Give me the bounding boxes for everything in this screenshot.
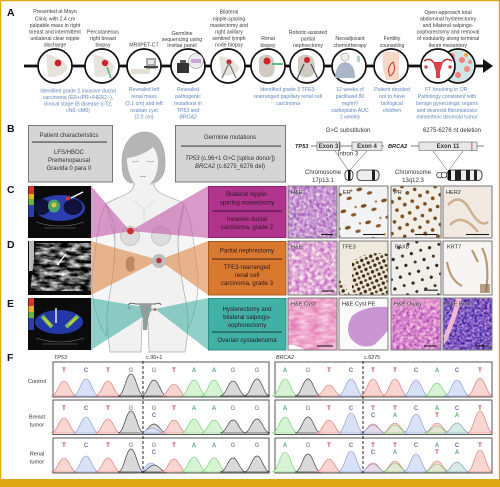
finding: chemo regimen: 12 weeks of — [336, 87, 364, 93]
chromatogram: TP53 breast tumor — [51, 400, 270, 434]
finding: breast pathology: carcinoma (ER+/PR+/HER2−), — [43, 95, 113, 101]
icon: fertility — [374, 49, 408, 83]
finding: renal pathology: rearranged papillary renal cell — [254, 94, 322, 100]
chromatogram: TP53 control: T — [172, 368, 176, 374]
finding: gynecologic pathology: FT brushing in OR: — [425, 87, 469, 93]
icon: chemotherapy — [332, 49, 366, 83]
chromosome 17 — [345, 170, 379, 180]
chromatogram labels: c.96+1 — [146, 355, 162, 361]
tile: KRT7: KRT7 — [447, 244, 461, 250]
chromatogram labels: TP53 — [54, 355, 67, 361]
finding: fertility decision: biological — [381, 101, 403, 107]
germline mutations box: TP53 (c.96+1 G>C [splice donor]) — [185, 156, 275, 162]
histology row: breast — [288, 186, 492, 238]
chromatogram: BRCA2 renal tumor: T — [435, 450, 439, 456]
germline mutations box: Germline mutations — [204, 135, 256, 141]
chromatogram: BRCA2 control: T — [371, 368, 375, 374]
BRCA2 gene: BRCA2 — [388, 144, 408, 150]
chromatogram: TP53 control: A — [212, 368, 217, 374]
chromatogram: TP53 control: G — [129, 368, 134, 374]
chromatogram: BRCA2 control: T — [393, 368, 397, 374]
step: presentation: breast and intermittent — [29, 30, 81, 36]
tile: TFE3: TFE3 — [342, 244, 356, 250]
BRCA2 gene: 6275-6276 nt deletion — [423, 128, 481, 134]
chromatogram: TP53 renal tumor: C — [152, 450, 157, 456]
magenta fans to breast — [91, 186, 208, 238]
TP53 gene: TP53 — [295, 144, 309, 150]
icon: sequencer — [171, 49, 205, 83]
TP53 gene: Exon 4 — [357, 144, 377, 150]
chromatogram: BRCA2 renal tumor: G — [306, 443, 311, 449]
icon: breast biopsy — [85, 49, 119, 83]
chromatogram: BRCA2 breast tumor: A — [283, 406, 288, 412]
ultrasound image — [28, 241, 91, 295]
finding: gynecologic pathology: mesenteric desmoid tumor — [416, 114, 478, 120]
chromatogram: TP53 breast tumor: A — [192, 406, 197, 412]
chromatogram: TP53 breast tumor: G — [255, 406, 260, 412]
chromatogram: TP53 renal tumor: G — [129, 443, 134, 449]
icon: mastectomy — [211, 49, 245, 83]
finding: mutations: pathogenic — [175, 94, 201, 100]
germline mutations box — [176, 126, 286, 182]
chromatogram: TP53 breast tumor: C — [152, 413, 157, 419]
chromatogram: BRCA2 renal tumor: A — [455, 450, 460, 456]
teal fans to ovary — [91, 298, 208, 350]
chromatogram: TP53 renal tumor — [51, 438, 270, 473]
finding: chemo regimen: mg/m²/ — [342, 101, 359, 107]
chromatogram labels: tumor — [30, 460, 44, 466]
chromatogram: BRCA2 control: G — [306, 368, 311, 374]
finding: chemo regimen: carboplatin AUC — [331, 108, 369, 114]
face — [127, 147, 158, 188]
panel label F: F — [7, 352, 14, 364]
chromatogram: TP53 control: G — [255, 368, 260, 374]
chromatogram: BRCA2 renal tumor: A — [393, 450, 398, 456]
PET-CT chest image — [28, 186, 91, 238]
icon: nephrectomy — [290, 49, 324, 83]
chromatogram: BRCA2 renal tumor: C — [371, 450, 376, 456]
finding: chemo regimen: 2 weekly — [340, 114, 360, 120]
panel label A: A — [7, 7, 15, 19]
tile: H&E — [288, 186, 337, 238]
chromatogram: TP53 control: C — [84, 368, 89, 374]
chromatogram: BRCA2 breast tumor: T — [327, 406, 331, 412]
gene diagrams — [295, 128, 484, 184]
panel label D: D — [7, 239, 15, 251]
tile: PAX8 — [391, 241, 441, 295]
chromatogram: TP53 control: G — [231, 368, 236, 374]
chromatogram: BRCA2 renal tumor — [272, 438, 493, 473]
chromatogram: BRCA2 renal tumor: T — [478, 443, 482, 449]
step: presentation: Clinic with 2.4 cm — [35, 16, 75, 22]
box: breast treatment: carcinoma, grade 2 — [221, 224, 274, 231]
step: biopsy: Percutaneous — [87, 30, 119, 36]
chromatogram: BRCA2 control: A — [435, 368, 440, 374]
step: mastectomy: mastectomy and — [210, 23, 248, 29]
step: presentation: unilateral clear nipple — [30, 36, 80, 42]
BRCA2 gene: Chromosome — [395, 170, 432, 176]
tile: H&E: H&E — [291, 244, 303, 250]
step: mastectomy: right axillary — [215, 30, 243, 36]
box: breast treatment: Bilateral nipple- — [226, 191, 268, 198]
finding: imaging: Revealed left — [129, 87, 160, 93]
finding: imaging: ovarian cyst — [130, 108, 158, 114]
step: nephrectomy: partial — [301, 36, 315, 42]
chromatogram: TP53 breast tumor: C — [84, 406, 89, 412]
icon: FT brushing pattern — [441, 49, 475, 83]
finding: renal pathology: Identified grade 3 TFE3- — [260, 87, 316, 93]
chromatogram: BRCA2 breast tumor: T — [393, 406, 397, 412]
step: chemotherapy: Neoadjuvant — [335, 36, 365, 42]
finding: imaging: renal mass — [131, 94, 157, 100]
chromatogram: BRCA2 breast tumor: C — [349, 406, 354, 412]
tile: H&E Cyst: H&E Cyst — [291, 302, 316, 308]
chromatogram: BRCA2 renal tumor: T — [327, 443, 331, 449]
BRCA2 gene — [388, 128, 484, 184]
box: renal treatment: renal cell — [235, 272, 259, 279]
chromatogram: TP53 renal tumor: T — [106, 443, 110, 449]
step: mastectomy: node biopsy — [215, 42, 243, 48]
hair — [122, 132, 165, 183]
illustration: female body — [92, 132, 198, 352]
finding: fertility decision: Patient decided — [374, 87, 410, 93]
chromatogram: TP53 renal tumor: G — [152, 443, 157, 449]
chromatogram: BRCA2 breast tumor — [272, 400, 493, 434]
chromatogram: TP53 control — [51, 362, 270, 397]
step: hysterectomy: of nodularity along terminal — [417, 36, 479, 42]
chromatogram: BRCA2 breast tumor: C — [371, 413, 376, 419]
chromatogram labels: Renal — [30, 452, 44, 458]
histology row: gynecologic — [288, 298, 492, 350]
finding: gynecologic pathology: and desmoid fibromatosis/ — [417, 108, 478, 114]
chromatogram: TP53 renal tumor: T — [62, 443, 66, 449]
tile: TFE3 — [339, 241, 388, 295]
chromatogram: BRCA2 renal tumor: C — [414, 443, 419, 449]
chromatogram: TP53 renal tumor: A — [212, 443, 217, 449]
chromatogram: BRCA2 control — [272, 362, 493, 397]
finding: mutations: Revealed — [177, 87, 199, 93]
chromatogram: TP53 renal tumor: T — [172, 443, 176, 449]
step: presentation: discharge — [44, 42, 66, 48]
tile: H&E Cyst PE: H&E Cyst PE — [342, 302, 376, 308]
chromatogram: TP53 breast tumor: T — [172, 406, 176, 412]
BRCA2 gene: 13q12.3 — [402, 178, 424, 184]
tile: H&E — [288, 241, 337, 295]
panel label B: B — [7, 123, 15, 135]
TP53 gene: Chromosome — [305, 170, 342, 176]
chromosome 13 — [437, 170, 482, 180]
kidneys — [126, 254, 166, 272]
finding: mutations: BRCA2 — [179, 114, 197, 120]
step: renal biopsy: biopsy — [260, 43, 276, 49]
icon: breast mass — [38, 49, 72, 83]
breast tumor — [127, 228, 134, 234]
chromatogram: TP53 breast tumor: T — [62, 406, 66, 412]
tile: H&E Endo: H&E Endo — [446, 302, 472, 308]
torso uptake — [35, 195, 85, 221]
chromatogram: TP53 renal tumor: A — [192, 443, 197, 449]
chromatogram: BRCA2 control: A — [283, 368, 288, 374]
finding: gynecologic pathology: Pathology consistent with — [418, 94, 476, 100]
tile: H&E Cyst PE — [339, 298, 388, 350]
step: hysterectomy: Open-approach total — [424, 10, 472, 16]
step: nephrectomy: nephrectomy — [293, 43, 323, 49]
box: gynecologic treatment: oophorectomy — [228, 322, 267, 329]
chromatogram: TP53 renal tumor: G — [255, 443, 260, 449]
finding: chemo regimen: paclitaxel 80 — [336, 94, 365, 100]
step: nephrectomy: Robotic-assisted — [289, 30, 327, 36]
gray scale — [29, 241, 34, 271]
chromatogram: BRCA2 renal tumor: T — [393, 443, 397, 449]
tile: HER2: HER2 — [446, 190, 461, 196]
tile: H&E Cyst — [288, 298, 337, 350]
finding: breast pathology: cN0, cM0) — [66, 108, 90, 114]
chromatogram: TP53 breast tumor: A — [212, 406, 217, 412]
TP53 gene: Exon 3 — [319, 144, 339, 150]
PET-CT pelvis image — [28, 298, 91, 350]
patient characteristics box — [28, 126, 112, 182]
icon: renal biopsy — [251, 49, 285, 83]
chromatogram: BRCA2 renal tumor: A — [283, 443, 288, 449]
step: presentation: palpable mass in right — [30, 23, 81, 29]
TP53 gene: Intron 3 — [338, 152, 359, 158]
tile: KRT7 — [443, 241, 492, 295]
chromatogram labels: BRCA2 — [276, 355, 294, 361]
box: breast treatment: Invasive ductal — [227, 216, 267, 223]
tile: PAX8: PAX8 — [395, 244, 409, 250]
step: hysterectomy: and bilateral salpingo- — [423, 23, 474, 29]
chromatogram: BRCA2 renal tumor: C — [455, 443, 460, 449]
tile: ER — [339, 186, 388, 238]
chromatogram: TP53 breast tumor: G — [152, 406, 157, 412]
color scale — [28, 186, 34, 217]
chromatogram: BRCA2 control: C — [349, 368, 354, 374]
panel A: timeline findings — [40, 87, 478, 120]
arms — [92, 204, 198, 336]
box: gynecologic treatment: Ovarian cystadenoma — [217, 337, 277, 344]
patient characteristics box: Gravida 0 para 0 — [47, 166, 92, 172]
step: germline sequencing: Invitae panel — [167, 43, 197, 49]
chromatogram: TP53 renal tumor: G — [231, 443, 236, 449]
box: breast treatment — [208, 186, 286, 238]
finding: imaging: (3.1 cm) and left — [125, 101, 163, 107]
chromatogram: TP53 control: T — [62, 368, 66, 374]
chromatogram labels: c.6275 — [364, 355, 380, 361]
patient characteristics box: Patient characteristics — [40, 133, 98, 139]
tile: ER: ER — [343, 190, 351, 196]
panel label E: E — [7, 298, 14, 310]
panel label C: C — [7, 184, 15, 196]
finding: breast pathology: clinical stage IB disease (cT2, — [44, 102, 112, 108]
step: mastectomy: sentinel lymph — [212, 36, 246, 42]
tile: H&E Endo — [443, 298, 492, 350]
finding: mutations: mutations in — [174, 101, 202, 107]
step: biopsy: right breast — [90, 36, 117, 42]
box: gynecologic treatment — [208, 298, 286, 350]
step: hysterectomy: abdominal hysterectomy — [420, 16, 477, 22]
chromatogram: TP53 control: G — [152, 368, 157, 374]
box: gynecologic treatment: bilateral salpingo- — [223, 314, 271, 321]
box: renal treatment — [208, 242, 286, 295]
ultrasound speckle — [30, 243, 91, 291]
step: mastectomy: nipple-sparing — [213, 16, 245, 22]
tile: PR — [391, 186, 441, 238]
tile: H&E Ovary: H&E Ovary — [394, 302, 422, 308]
step: imaging: MRI/PET-CT — [129, 42, 160, 48]
chromatogram labels — [28, 355, 380, 466]
step: presentation: Presented at Mayo — [33, 9, 77, 15]
panel A: timeline headings — [29, 9, 479, 49]
chromatogram: BRCA2 breast tumor: T — [371, 406, 375, 412]
finding: renal pathology: carcinoma — [276, 101, 300, 107]
finding: fertility decision: not to have — [379, 94, 405, 100]
chromatogram: BRCA2 breast tumor: A — [435, 406, 440, 412]
chromatogram: BRCA2 renal tumor: A — [435, 443, 440, 449]
germline mutations box: BRCA2 (c.6275_6276 del) — [195, 164, 265, 170]
TP53 gene: G>C substitution — [326, 128, 370, 134]
tile: H&E Ovary — [391, 298, 441, 350]
chromatogram: BRCA2 breast tumor: T — [478, 406, 482, 412]
icon: uterus — [421, 49, 455, 83]
finding: fertility decision: children — [383, 108, 401, 114]
chromatogram: BRCA2 breast tumor: A — [393, 413, 398, 419]
chromatogram: BRCA2 breast tumor: A — [455, 413, 460, 419]
box: renal treatment: TFE3-rearranged — [224, 264, 270, 271]
chromatogram: BRCA2 renal tumor: T — [371, 443, 375, 449]
step: germline sequencing: sequencing using — [162, 37, 202, 43]
step: hysterectomy: oophorectomy and removal — [417, 30, 479, 36]
TP53 gene: 17p13.1 — [312, 178, 334, 184]
box: gynecologic treatment: Hysterectomy and — [222, 306, 272, 313]
patient characteristics box: LFS/HBOC — [54, 150, 85, 156]
neck contour lines — [134, 200, 155, 222]
tile: HER2 — [443, 186, 492, 238]
mutation position dashed lines — [143, 361, 363, 473]
box: breast treatment: sparing mastectomy — [220, 200, 275, 206]
chromatogram: BRCA2 control: C — [455, 368, 460, 374]
chromatogram: BRCA2 breast tumor: C — [455, 406, 460, 412]
facial features — [132, 161, 154, 177]
chromatogram: TP53 control: T — [106, 368, 110, 374]
timeline arrow — [24, 59, 493, 73]
chromatogram: TP53 breast tumor: G — [231, 406, 236, 412]
finding: mutations: TP53 and — [177, 108, 199, 114]
chromatogram: TP53 breast tumor: G — [129, 406, 134, 412]
chromatogram labels: Breast — [29, 414, 46, 420]
chromatogram: BRCA2 control: C — [414, 368, 419, 374]
timeline icons — [38, 49, 475, 83]
box: renal treatment: Partial nephrectomy — [220, 248, 275, 254]
orange fans to kidney — [91, 241, 208, 295]
uterus and ovaries — [127, 303, 161, 330]
torso and legs — [106, 184, 188, 352]
step: mastectomy: Bilateral — [220, 10, 238, 16]
breast glands — [120, 226, 170, 246]
step: biopsy: biopsy — [96, 42, 111, 48]
box: renal treatment: carcinoma, grade 3 — [221, 280, 274, 287]
tile: PR: PR — [394, 190, 402, 196]
step: counseling: Fertility — [384, 36, 401, 42]
chromatogram: TP53 breast tumor: T — [106, 406, 110, 412]
step: renal biopsy: Renal — [261, 36, 275, 42]
chromatogram: BRCA2 control: T — [327, 368, 331, 374]
finding: gynecologic pathology: benign gynecologic organs — [416, 101, 478, 107]
color scale — [28, 298, 34, 330]
TP53 gene — [295, 128, 384, 184]
finding: breast pathology: Identified grade 2 invasive ductal — [40, 88, 116, 94]
step: germline sequencing: Germline — [171, 31, 193, 37]
histology row: kidney — [288, 241, 492, 295]
chromatogram: BRCA2 breast tumor: G — [306, 406, 311, 412]
chromatogram: TP53 control: A — [192, 368, 197, 374]
BRCA2 gene: Exon 11 — [437, 144, 460, 150]
chromatogram: TP53 renal tumor: C — [84, 443, 89, 449]
chromatogram: BRCA2 breast tumor: T — [435, 413, 439, 419]
chromatogram: BRCA2 control: T — [478, 368, 482, 374]
step: counseling: counseling — [380, 43, 405, 49]
chromatogram: BRCA2 breast tumor: C — [414, 406, 419, 412]
chromatogram labels: Control — [28, 379, 46, 385]
icon: scanner — [127, 49, 161, 83]
tile: H&E: H&E — [291, 190, 303, 196]
step: chemotherapy: chemotherapy — [334, 43, 367, 49]
patient characteristics box: Premenopausal — [48, 158, 90, 164]
step: hysterectomy: ileum mesentery — [429, 43, 467, 49]
chromatogram labels: tumor — [30, 422, 44, 428]
chromatogram: BRCA2 renal tumor: C — [349, 443, 354, 449]
finding: imaging: (2.0 cm) — [134, 114, 154, 120]
colored treatment boxes — [208, 186, 286, 350]
